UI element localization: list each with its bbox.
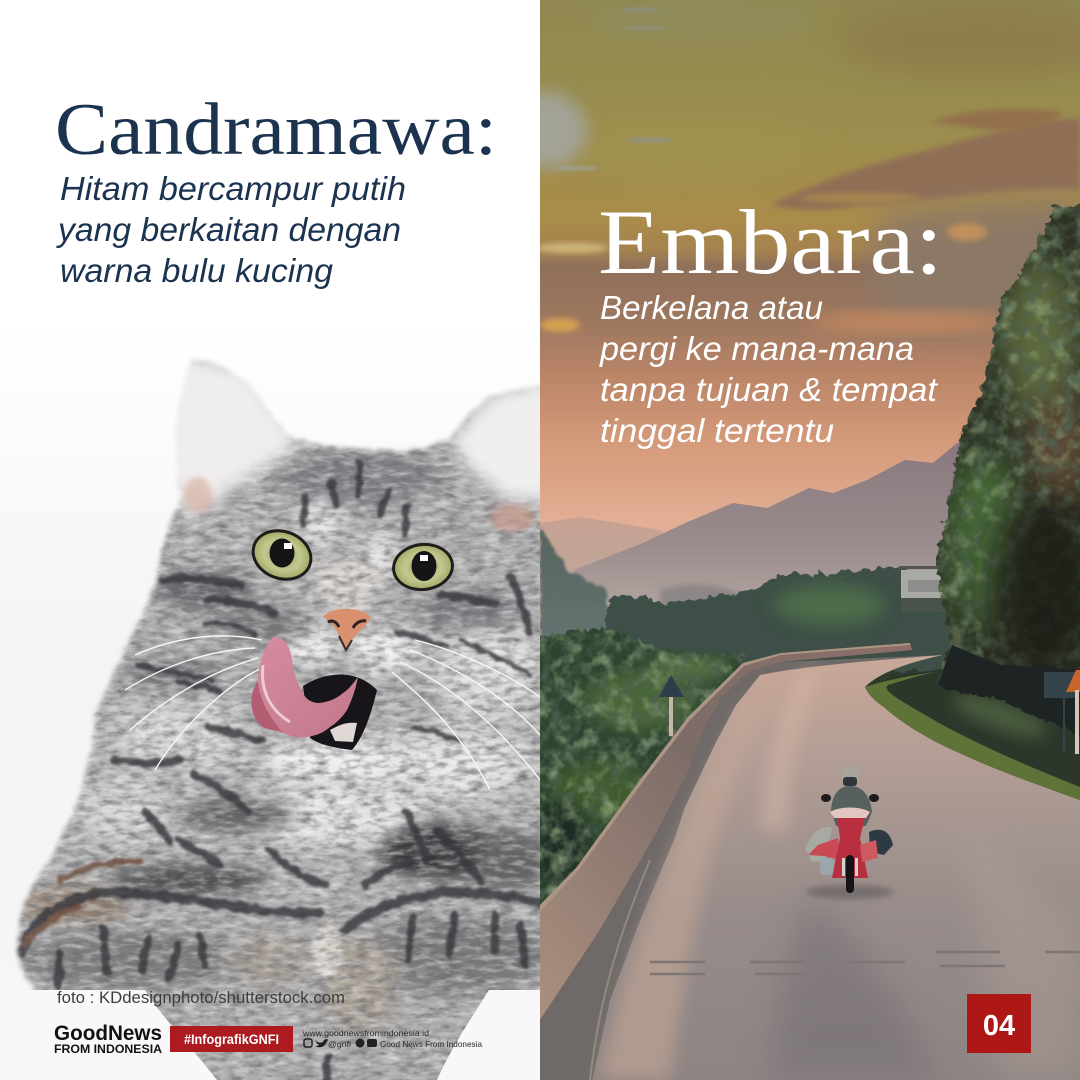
icon: left eye [252,529,312,581]
road shoulder [540,655,943,1080]
icon: nose [323,609,371,650]
road [590,655,1080,1080]
title: Candramawa: Candramawa: [55,89,497,171]
footer: logo GoodNews from Indonesia: FROM INDONESIA [54,1044,162,1056]
cat illustration [0,340,560,1080]
footer: hashtag badge [170,1026,293,1052]
text block: Embara definition: pergi ke mana-mana [599,330,914,367]
footer: hashtag badge: #InfografikGNFI [184,1032,279,1047]
right grass verge [865,668,1080,800]
panel: candramawa cat [0,357,540,1080]
icon: twitter [315,1039,328,1047]
tabby stripes [21,463,540,1080]
icon: right eye [392,542,454,592]
icon: tongue [252,637,358,738]
icon: motorcycle rider [805,765,894,899]
footer: website and social handles [302,1028,482,1049]
text block: Embara definition: tinggal tertentu [600,412,834,449]
text block: Embara definition: Berkelana atau [600,289,823,326]
mouth [303,674,377,750]
text block: Candramawa definition: Hitam bercampur putih [60,170,406,207]
road signs [659,670,1080,754]
footer white band pieces [30,990,217,1080]
footer: logo GoodNews from Indonesia: GoodNews [54,1022,162,1045]
icon: instagram [304,1039,312,1047]
page number badge: 04 [983,1010,1015,1042]
distant trees [600,567,950,680]
page number badge [967,994,1031,1053]
barrier wall [540,643,912,1020]
whiskers [125,636,540,790]
fur texture [0,340,540,1080]
footer: logo GoodNews from Indonesia [54,1022,162,1056]
sky [503,0,1080,650]
text block: Candramawa definition: yang berkaitan dengan [56,211,401,248]
light fur masses [70,485,545,903]
dark fur masses [20,450,550,1035]
footer: website and social handles: @gnfi [328,1039,351,1049]
photo credit: foto : KDdesignphoto/shutterstock.com [57,989,345,1007]
footer: website and social handles: www.goodnewsfromindonesia.id [302,1028,429,1038]
text block: Candramawa definition: warna bulu kucing [60,252,334,289]
icon: facebook [356,1038,364,1048]
right hillside trees [935,204,1080,736]
ears [174,358,540,534]
panel: embara road scene [503,0,1080,1080]
mountains [540,442,960,638]
icon: youtube [367,1039,377,1047]
left foliage [540,626,746,904]
building [899,566,950,612]
text block: Embara definition: tanpa tujuan & tempat [600,371,939,408]
title: Embara: Embara: [598,191,943,293]
footer: website and social handles: Good News From Indonesia [380,1039,482,1049]
